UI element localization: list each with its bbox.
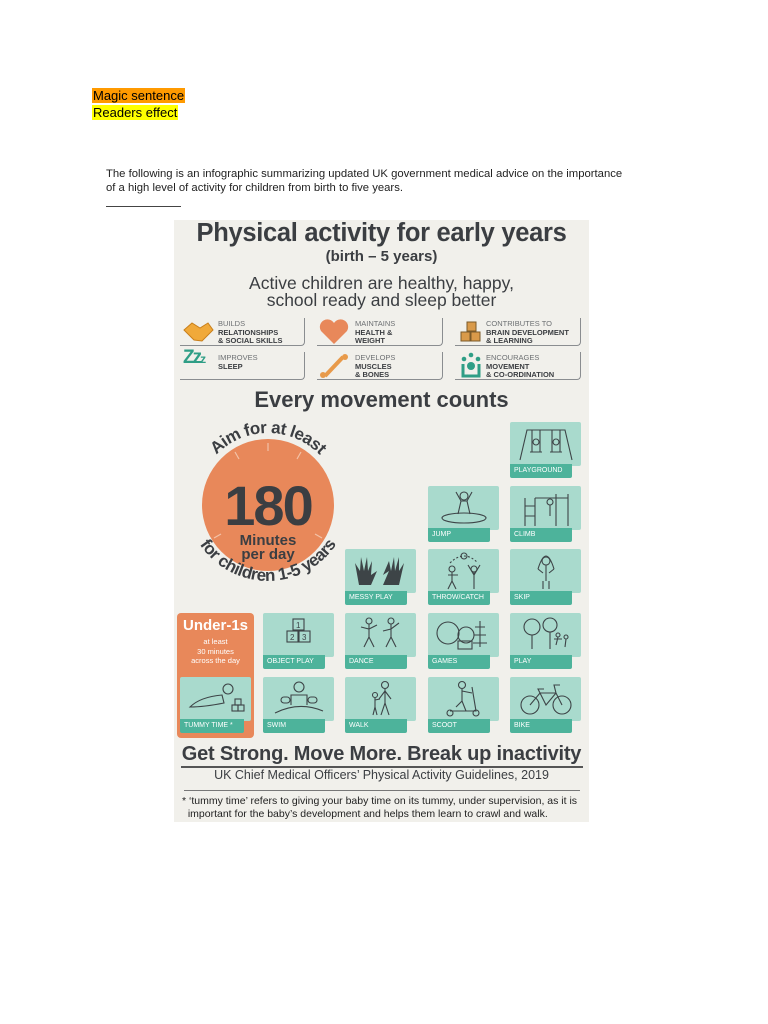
infographic panel [174, 220, 589, 822]
tile: swim [263, 677, 334, 733]
panel: under-1s: 30 minutes [197, 646, 234, 656]
tile: object play [263, 613, 334, 669]
footnote: important for the baby’s development and helps them learn to crawl and walk. [188, 808, 548, 820]
benefit: sleep: SLEEP [218, 362, 243, 370]
tagline: school ready and sleep better [267, 290, 496, 310]
tile: messy play [345, 549, 416, 605]
tile: swim: SWIM [267, 722, 286, 729]
tile: climb [510, 486, 581, 542]
180 minutes clock badge: for children 1-5 years [200, 539, 336, 581]
tile: games [428, 613, 499, 669]
tile: play: PLAY [514, 658, 531, 665]
tile: object play: OBJECT PLAY [267, 658, 314, 665]
180 minutes clock badge [200, 423, 336, 581]
benefit: muscles [317, 352, 443, 380]
180 minutes clock badge: per day [241, 546, 295, 563]
benefit: relationships: RELATIONSHIPS [218, 328, 278, 336]
tile: tummy time: TUMMY TIME * [184, 722, 233, 729]
tagline: Active children are healthy, happy, [249, 273, 514, 293]
panel: under-1s: at least [203, 637, 228, 646]
tile: object play: 2 [290, 633, 295, 642]
benefit: brain development: & LEARNING [486, 336, 533, 345]
tile: bike: BIKE [514, 722, 530, 729]
tile: climb: CLIMB [514, 531, 535, 538]
benefit: brain development: CONTRIBUTES TO [486, 319, 552, 328]
tile: walk: WALK [349, 722, 369, 729]
footnote [182, 795, 577, 820]
benefit: health [317, 318, 443, 346]
panel: under-1s: across the day [191, 656, 240, 665]
benefit: relationships [180, 318, 305, 346]
tile: bike [510, 677, 581, 733]
icon: blocks [460, 322, 480, 342]
tile: playground [510, 422, 581, 478]
tile: object play: 1 [296, 621, 301, 630]
icon: handshake [183, 322, 214, 342]
tile: jump: JUMP [432, 531, 451, 538]
intro paragraph: The following is an infographic summarizing updated UK government medical advice on the importance of a high level of activity for children from birth to five years. [106, 168, 622, 194]
tile: scoot: SCOOT [432, 722, 457, 729]
panel: under-1s [177, 613, 254, 738]
highlighted note: readers effect: Readers effect [93, 105, 177, 120]
tile: skip [510, 549, 581, 605]
180 minutes clock badge: Aim for at least [212, 423, 326, 455]
benefit: sleep [180, 352, 305, 380]
source line: UK Chief Medical Officers’ Physical Activity Guidelines, 2019 [214, 768, 549, 782]
tile: dance: DANCE [349, 658, 374, 665]
panel: under-1s: Under-1s [183, 617, 248, 634]
tagline [249, 273, 514, 310]
benefit: muscles: DEVELOPS [355, 353, 395, 362]
benefit: relationships: BUILDS [218, 319, 245, 328]
tile: playground: PLAYGROUND [514, 467, 562, 474]
tile: object play: 3 [302, 633, 307, 642]
icon: zzz: Zzz [183, 347, 204, 368]
benefit: movement [455, 352, 581, 380]
tile: games: GAMES [432, 658, 457, 665]
icon: juggling child [462, 352, 480, 378]
benefit: muscles: MUSCLES [355, 362, 392, 370]
tile: jump [428, 486, 499, 542]
benefit: sleep: IMPROVES [218, 353, 258, 362]
tile: play [510, 613, 581, 669]
tile: walk [345, 677, 416, 733]
tile: skip: SKIP [514, 594, 530, 601]
benefit: health: MAINTAINS [355, 319, 395, 328]
tile: messy play: MESSY PLAY [349, 594, 393, 601]
benefit: relationships: & SOCIAL SKILLS [218, 336, 282, 345]
180 minutes clock badge: 180 [224, 474, 312, 537]
benefit: movement: MOVEMENT [486, 362, 529, 370]
benefit: brain development: BRAIN DEVELOPMENT [486, 328, 569, 336]
tile: throw/catch: THROW/CATCH [432, 594, 484, 601]
heading: every movement counts: Every movement counts [254, 387, 509, 412]
benefit: movement: ENCOURAGES [486, 353, 539, 362]
benefit: health: WEIGHT [355, 336, 385, 345]
footnote: * ‘tummy time’ refers to giving your baby time on its tummy, under supervision, as it is [182, 795, 577, 807]
180 minutes clock badge: Minutes [240, 532, 296, 549]
highlighted note: magic sentence: Magic sentence [93, 88, 184, 103]
tile: dance [345, 613, 416, 669]
benefit: health: HEALTH & [355, 328, 392, 336]
tile: tummy time [180, 677, 251, 733]
benefit: brain development [455, 318, 581, 346]
benefit: muscles: & BONES [355, 370, 389, 379]
icon: heart [320, 319, 348, 344]
icon: bone [320, 354, 348, 378]
subtitle: (birth – 5 years) [326, 248, 437, 265]
tile: throw/catch [428, 549, 499, 605]
slogan: Get Strong. Move More. Break up inactivity [182, 743, 581, 765]
tile: scoot [428, 677, 499, 733]
title: Physical activity for early years [196, 219, 566, 247]
benefit: movement: & CO-ORDINATION [486, 370, 554, 379]
